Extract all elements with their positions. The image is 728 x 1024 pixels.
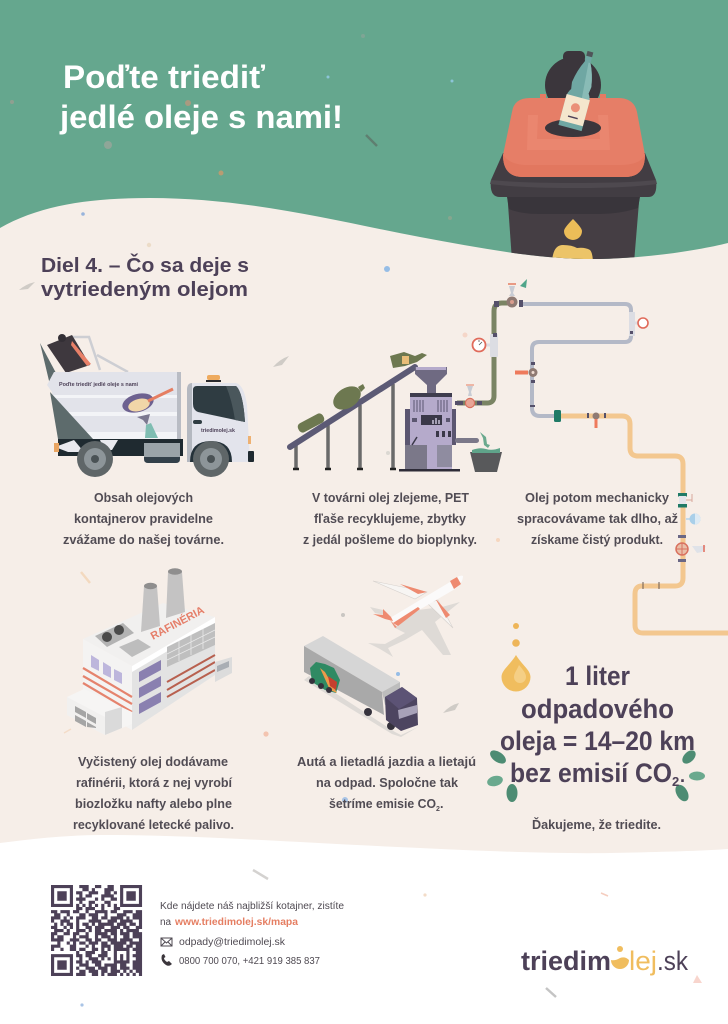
caption: truck: kontajnerov pravidelne (74, 512, 213, 526)
caption: refinery: biozložku nafty alebo plne (75, 797, 232, 811)
callout: 1 liter statistic: 2 (672, 774, 679, 789)
valves and gauges (455, 279, 706, 589)
caption: factory: V továrni olej zlejeme, PET (312, 491, 469, 505)
caption: truck: zvážame do našej továrne. (63, 533, 224, 547)
caption: mechanical processing: Olej potom mechanicky (525, 491, 669, 505)
caption: vehicles: na odpad. Spoločne tak (316, 776, 458, 790)
caption: vehicles: 2 (436, 806, 440, 813)
contact information: Kde nájdete náš najbližší kotajner, zistíte (160, 901, 344, 912)
caption: refinery: Vyčistený olej dodávame (78, 755, 228, 769)
title: Poďte triediť (63, 59, 266, 95)
bottles on belt (296, 352, 427, 434)
green header wave (0, 0, 728, 259)
illustration: pipeline (455, 279, 728, 633)
callout: 1 liter statistic: bez emisií CO (510, 758, 672, 788)
caption: factory (303, 491, 477, 547)
icon: container with bottle (490, 49, 657, 275)
caption: mechanical processing: získame čistý produkt. (531, 533, 663, 547)
logo (521, 946, 688, 976)
icon: envelope (161, 938, 172, 946)
callout: 1 liter statistic: . (680, 766, 685, 786)
title (59, 59, 343, 135)
callout: 1 liter statistic: odpadového (521, 694, 674, 724)
plane (373, 576, 463, 628)
illustration: refinery (67, 568, 232, 735)
callout: 1 liter statistic (500, 661, 695, 789)
caption: factory: fľaše recyklujeme, zbytky (314, 512, 466, 526)
caption: vehicles: . (440, 797, 443, 811)
illustration: factory with conveyor (290, 352, 502, 472)
refinery sign: RAFINÉRIA (148, 603, 207, 643)
heading: Diel 4. – Čo sa deje s (41, 253, 249, 277)
articulated truck (304, 636, 400, 692)
heading: vytriedeným olejom (41, 279, 248, 301)
contact information: 0800 700 070, +421 919 385 837 (179, 956, 320, 967)
callout: 1 liter statistic: 1 liter (565, 661, 630, 691)
caption: refinery: recyklované letecké palivo. (73, 818, 234, 832)
illustration: plane and truck (304, 576, 463, 737)
caption: refinery: rafinérii, ktorá z nej vyrobí (76, 776, 233, 790)
callout: 1 liter statistic: oleja = 14–20 km (500, 726, 695, 756)
contact information: odpady@triedimolej.sk (179, 937, 286, 948)
icon: phone (162, 954, 172, 966)
caption: refinery (73, 755, 234, 832)
caption: factory: z jedál pošleme do bioplynky. (303, 533, 477, 547)
logo: lej (629, 946, 657, 976)
wheels (77, 441, 113, 477)
caption: vehicles: šetríme emisie CO (329, 797, 436, 811)
caption: vehicles (297, 755, 476, 813)
icon: leaves (486, 748, 705, 804)
truck door logo: triedimolej.sk (201, 428, 236, 434)
contact information: www.triedimolej.sk/mapa (174, 917, 298, 928)
QR code (51, 887, 142, 974)
icon: oil drops (502, 623, 530, 692)
caption: vehicles: Autá a lietadlá jazdia a lietajú (297, 755, 476, 769)
illustration: collection truck (40, 334, 254, 477)
title: jedlé oleje s nami! (59, 99, 343, 135)
truck shadow (304, 676, 418, 737)
bottle (558, 50, 594, 131)
caption: mechanical processing: spracovávame tak dlho, až (517, 512, 678, 526)
heading (41, 253, 249, 301)
caption: truck: Obsah olejových (94, 491, 193, 505)
plane shadow (368, 602, 460, 657)
white footer wave (0, 835, 728, 1024)
contact information (160, 901, 344, 967)
caption: truck (63, 491, 224, 547)
caption: mechanical processing (517, 491, 678, 547)
logo: .sk (657, 946, 688, 976)
truck side slogan: Poďte triediť jedlé oleje s nami (59, 382, 139, 388)
contact information: na (160, 917, 172, 928)
logo: triedim (521, 946, 611, 976)
thank-you text: Ďakujeme, že triedite. (532, 817, 661, 832)
